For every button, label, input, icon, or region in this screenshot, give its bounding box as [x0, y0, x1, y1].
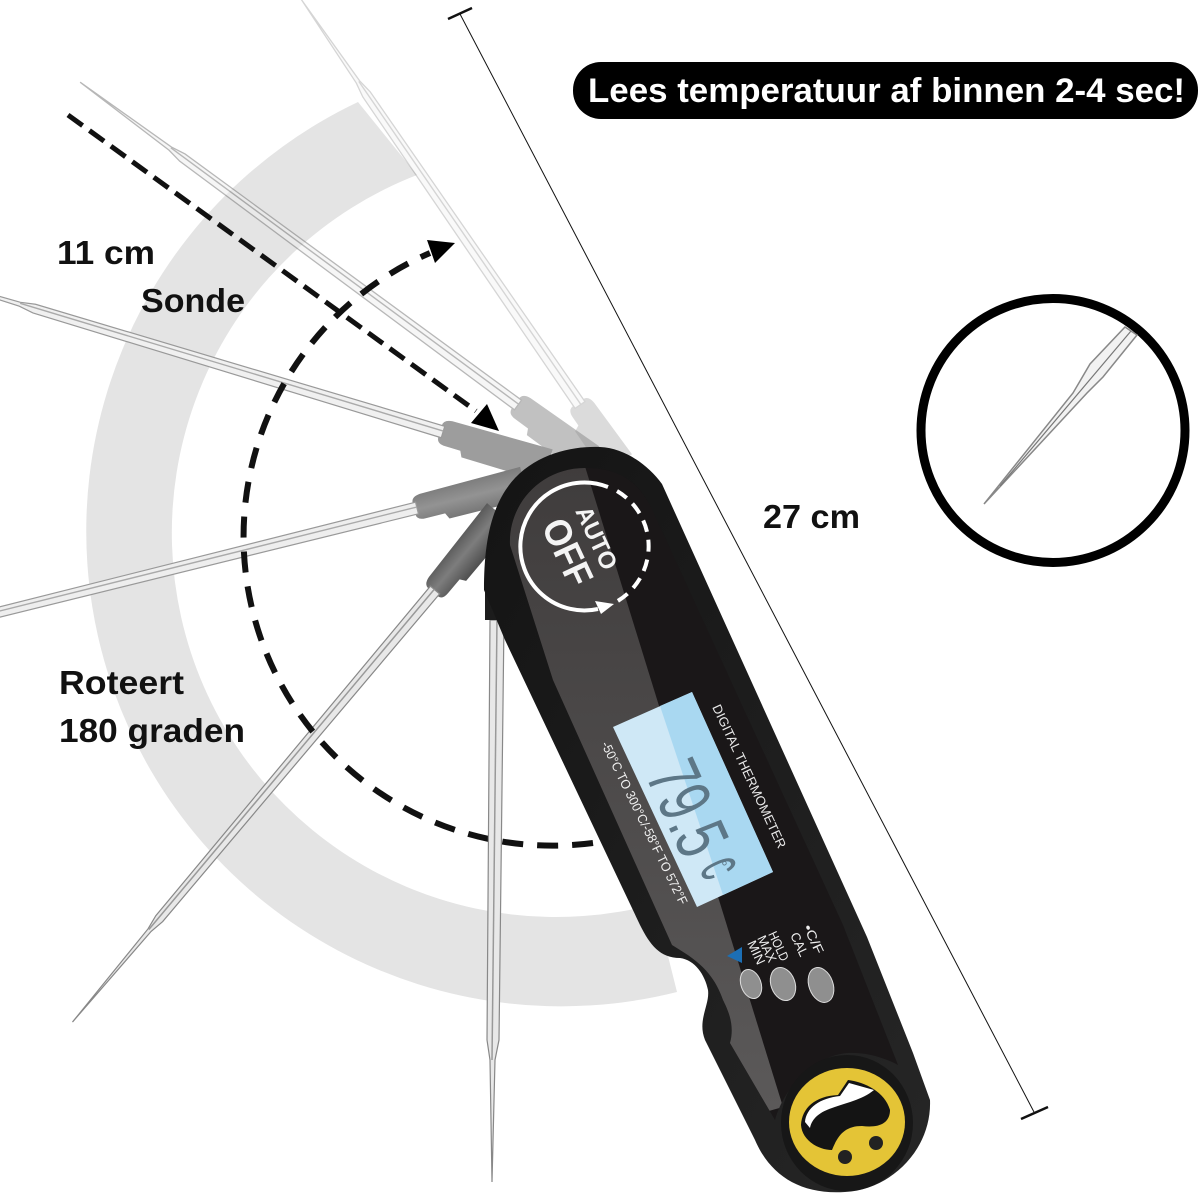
- label: Sonde: Sonde: [141, 282, 245, 319]
- button labels: HOLD: [765, 929, 792, 963]
- LCD screen: °: [711, 859, 729, 871]
- probe position 5: [69, 70, 599, 474]
- LCD screen: [613, 692, 773, 907]
- label: 180 graden: 180 graden: [59, 712, 245, 749]
- temperature reading: 79.5: [630, 748, 745, 868]
- LCD screen: c: [686, 843, 760, 888]
- button labels: CAL: [787, 930, 811, 959]
- length dimension line 27 cm: [448, 8, 1048, 1119]
- glossy stripe: [510, 468, 782, 1111]
- temperature range label: -50°C TO 300°C/-58°F TO 572°F: [598, 739, 691, 907]
- thermometer body: [480, 447, 930, 1192]
- auto off timer ring: [520, 482, 649, 614]
- bottle opener: [781, 1055, 913, 1191]
- icon: water drop: [727, 947, 742, 963]
- outer housing: [484, 447, 930, 1192]
- auto off label: [533, 502, 622, 593]
- title pill: Lees temperatuur af binnen 2-4 sec!: [588, 72, 1185, 110]
- probe position 2: [60, 503, 513, 1034]
- title pill: [573, 62, 1198, 119]
- hinge: [485, 575, 512, 620]
- label: Roteert: Roteert: [59, 664, 184, 701]
- button labels: MAX: [754, 933, 780, 965]
- dashed probe arrow: [68, 115, 499, 431]
- gray rotation arc band: [86, 102, 677, 1006]
- label: 11 cm: 11 cm: [57, 234, 155, 271]
- button labels: •C/F: [800, 922, 827, 956]
- auto off label: AUTO: [570, 502, 622, 574]
- label: 27 cm: 27 cm: [763, 498, 860, 535]
- probe position 1 (vertical): [487, 620, 504, 1182]
- buttons: [736, 964, 838, 1006]
- probe position 3: [0, 467, 528, 632]
- probe position 6 (faintest): [286, 0, 632, 473]
- probe position 4: [0, 257, 553, 482]
- dashed rotation arrow: [244, 240, 593, 846]
- button labels: MIN: [744, 938, 768, 967]
- button labels: [744, 922, 827, 967]
- front face: [510, 468, 898, 1120]
- digital thermometer label: DIGITAL THERMOMETER: [709, 702, 789, 851]
- inset circle: probe tip detail: [921, 298, 1185, 562]
- auto off label: OFF: [533, 512, 600, 593]
